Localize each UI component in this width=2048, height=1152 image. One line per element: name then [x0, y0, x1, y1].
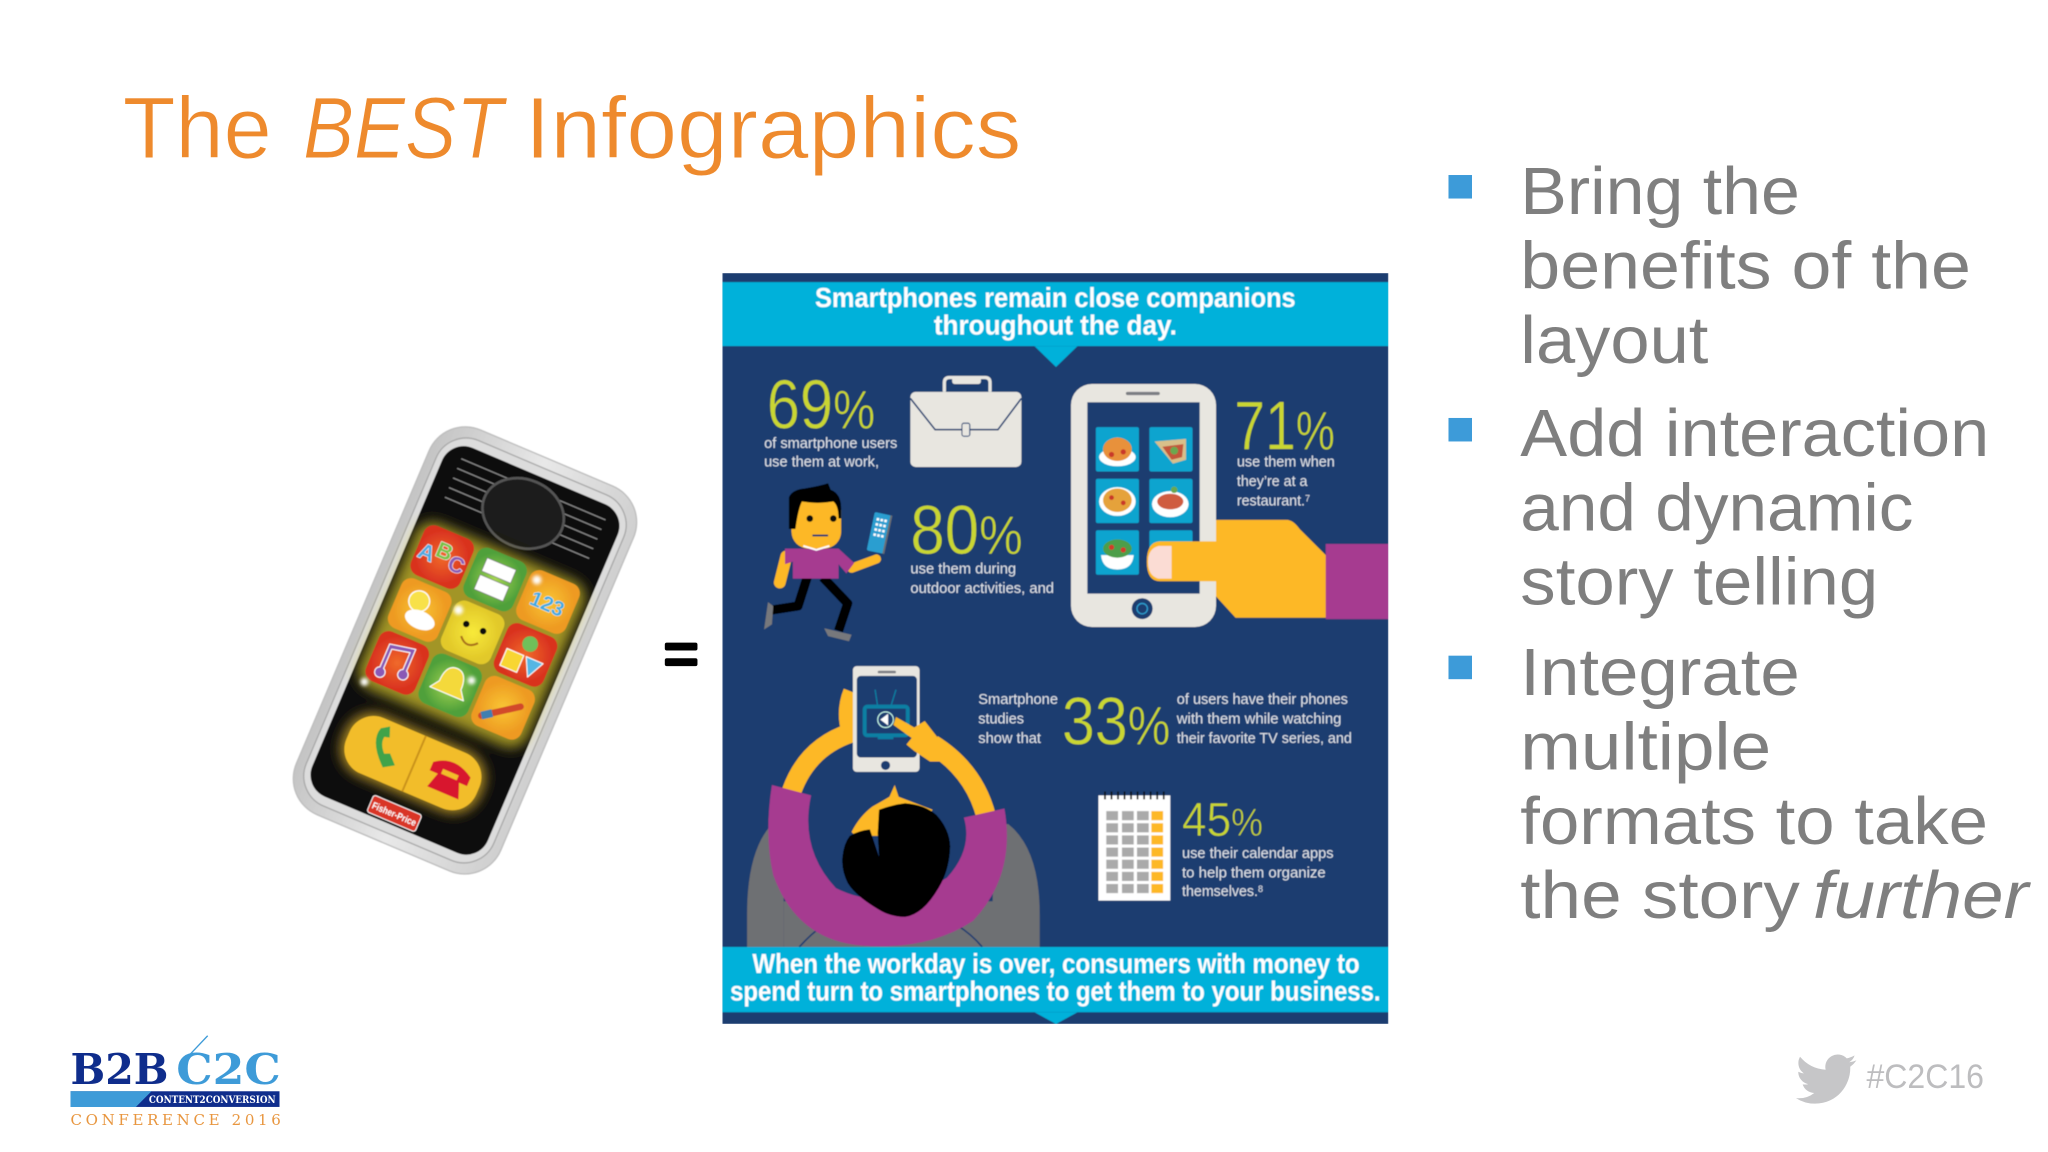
stat: 33% tv	[978, 692, 1352, 746]
bullet list	[1448, 155, 2032, 933]
stat: 69% at work	[764, 379, 898, 470]
small phone with tv app	[853, 666, 920, 772]
stat: 71% restaurant: use them when	[1237, 454, 1335, 470]
stat: 71% restaurant: they’re at a	[1237, 474, 1307, 490]
stat: 33% tv: Smartphone	[978, 692, 1058, 708]
stat: 45% calendar: themselves.	[1182, 884, 1259, 900]
icon: briefcase	[910, 376, 1021, 467]
bullet 1: Bring the	[1520, 155, 1800, 229]
footer banner: When the workday is over, consumers with money to	[752, 948, 1360, 979]
conference logo: CONFERENCE 2016	[71, 1111, 281, 1129]
hand tapping phone	[892, 716, 940, 762]
footer banner: spend turn to smartphones to get them to your business.	[730, 975, 1381, 1006]
bullet 3: multiple	[1520, 710, 1771, 784]
stat: 33% tv: show that	[978, 731, 1041, 747]
stat: 33% tv: of users have their phones	[1177, 692, 1348, 708]
icon: calendar	[1098, 792, 1170, 901]
app tiles: A	[415, 538, 439, 567]
bullet 2: Add interaction	[1520, 397, 1989, 471]
header banner: Smartphones remain close companions	[815, 282, 1296, 313]
bullet 2: story telling	[1520, 546, 1878, 620]
hashtag: #C2C16	[1866, 1058, 1984, 1096]
stat: 71% restaurant: 7	[1305, 494, 1310, 504]
stat: 69% at work: 69%	[767, 365, 875, 443]
bullet 3: formats to take	[1520, 785, 1988, 859]
title: BEST	[303, 79, 508, 177]
icon: twitter bird	[1796, 1054, 1856, 1104]
stat: 45% calendar: use their calendar apps	[1182, 846, 1334, 862]
stat: 71% restaurant: 71%	[1234, 386, 1335, 464]
app tiles: 123	[526, 587, 567, 622]
stat: 45% calendar: to help them organize	[1182, 866, 1326, 882]
bullet 2: and dynamic	[1520, 471, 1913, 545]
head	[842, 803, 950, 917]
bullet 2	[1448, 397, 1989, 620]
app tiles	[362, 522, 583, 743]
toy smartphone photo: Fisher-Price	[370, 801, 418, 829]
conference logo: C2C	[176, 1045, 281, 1094]
illustration: phone with food apps held by hand	[1071, 384, 1388, 627]
twitter hashtag	[1796, 1054, 1984, 1104]
stat: 33% tv: 33%	[1062, 684, 1170, 759]
stat: 80% outdoors: use them during	[910, 561, 1016, 577]
stat: 69% at work: of smartphone users	[764, 436, 897, 452]
bullet 3: Integrate	[1520, 636, 1800, 710]
title: Infographics	[525, 79, 1021, 177]
speaker button	[471, 466, 575, 561]
bullet 1: benefits of the	[1520, 230, 1971, 304]
footer banner	[722, 947, 1388, 1024]
illustration: running man with phone	[764, 483, 891, 641]
bullet 1	[1448, 155, 1971, 378]
stat: 45% calendar	[1181, 802, 1334, 897]
toy smartphone photo	[281, 415, 649, 886]
stat: 33% tv: their favorite TV series, and	[1177, 731, 1352, 747]
title	[123, 79, 1021, 177]
conference logo: CONTENT2CONVERSION	[149, 1095, 276, 1106]
illustration: seated person watching phone, top view	[747, 666, 1040, 948]
bullet 3: the story	[1520, 859, 1801, 933]
equals sign	[665, 643, 697, 666]
stat: 80% outdoors	[910, 504, 1054, 596]
conference logo	[71, 1036, 281, 1129]
header banner: throughout the day.	[934, 309, 1177, 340]
stat: 45% calendar: 8	[1258, 884, 1263, 894]
Fisher-Price logo	[367, 795, 422, 832]
stat: 45% calendar: 45%	[1182, 793, 1263, 847]
infographic panel	[722, 273, 1388, 1024]
conference logo: B2B	[71, 1045, 168, 1094]
app tiles: B	[432, 537, 457, 566]
sparkles	[360, 575, 541, 686]
stat: 71% restaurant: restaurant.	[1237, 493, 1306, 509]
stat: 80% outdoors: 80%	[910, 491, 1023, 569]
app tiles: C	[444, 550, 469, 579]
food tiles	[1096, 427, 1192, 575]
stat: 80% outdoors: outdoor activities, and	[910, 581, 1054, 597]
bullet 3	[1448, 636, 2032, 933]
tile glow	[352, 516, 591, 754]
bullet 3: further	[1813, 859, 2032, 933]
stat: 33% tv: studies	[978, 712, 1024, 728]
call buttons	[332, 704, 494, 822]
stat: 69% at work: use them at work,	[764, 454, 879, 470]
bullet 1: layout	[1520, 304, 1709, 378]
header banner	[722, 282, 1388, 367]
stat: 33% tv: with them while watching	[1176, 712, 1341, 728]
stat: 71% restaurant	[1236, 401, 1335, 506]
title: The	[123, 79, 272, 177]
